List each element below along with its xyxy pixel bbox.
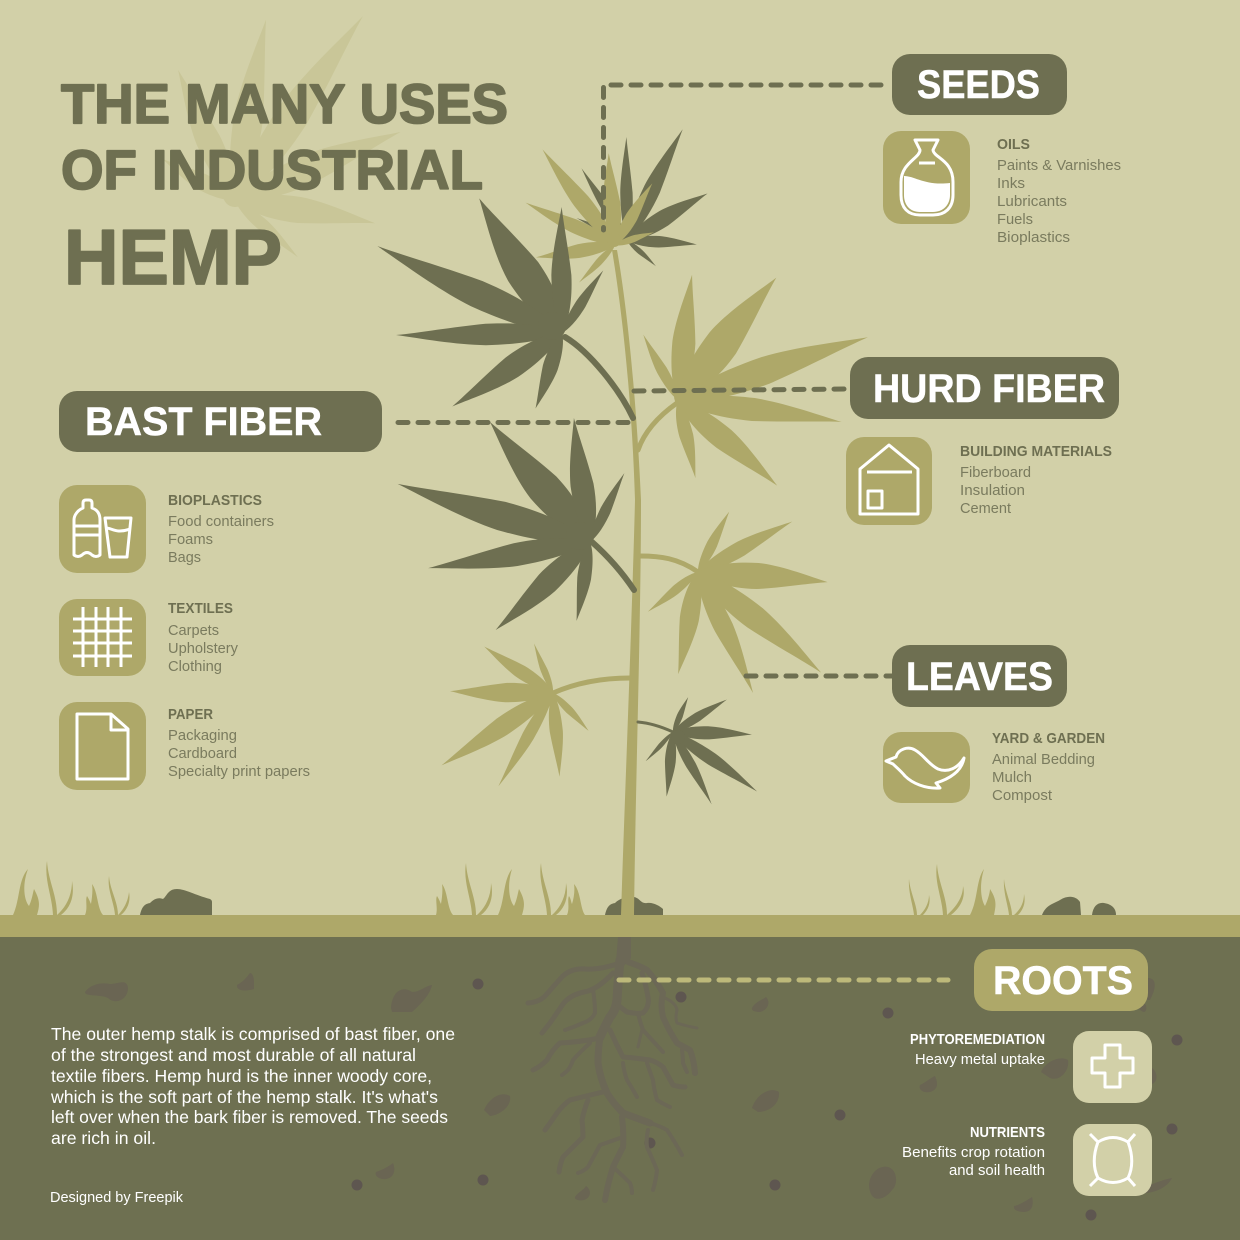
connector: leaves	[746, 674, 893, 678]
text block: textiles	[168, 600, 238, 675]
text block: paper: PAPER	[168, 706, 213, 723]
heading: leaves: LEAVES	[906, 655, 1053, 699]
heading: hurd fiber: HURD FIBER	[873, 367, 1105, 411]
text block: phytoremediation: Heavy metal uptake	[915, 1051, 1045, 1068]
leaf: top light	[522, 145, 657, 285]
text block: description: which is the soft part of the hemp stalk. It's what's	[50, 1087, 438, 1107]
connector: bast fiber	[398, 420, 630, 425]
text block: yard and garden: Compost	[992, 787, 1053, 804]
text block: oils: OILS	[997, 136, 1030, 153]
hemp roots	[528, 937, 697, 1200]
leaf: middle left dark	[393, 412, 629, 639]
heading: bast fiber	[59, 391, 382, 452]
icon: bottle and cup	[59, 485, 146, 573]
connector: seeds	[604, 85, 881, 230]
icon: bird	[883, 732, 970, 803]
leaf branches	[553, 337, 698, 732]
text block: description: of the strongest and most durable of all natural	[51, 1045, 416, 1065]
text block: bioplastics: BIOPLASTICS	[168, 492, 262, 509]
text block: paper: Specialty print papers	[168, 763, 310, 780]
heading: seeds: SEEDS	[917, 63, 1040, 107]
credit: Designed by Freepik	[50, 1189, 183, 1206]
text block: bioplastics: Bags	[168, 549, 201, 566]
text block: building materials: Fiberboard	[960, 464, 1031, 481]
text block: yard and garden: YARD & GARDEN	[992, 730, 1105, 747]
icon: house	[846, 437, 932, 525]
text block: textiles: Clothing	[168, 658, 222, 675]
text block: oils: Inks	[997, 175, 1025, 192]
text block: oils: Lubricants	[997, 193, 1067, 210]
title: THE MANY USES	[61, 72, 508, 135]
text block: yard and garden: Mulch	[992, 769, 1032, 786]
text block: oils: Bioplastics	[997, 229, 1070, 246]
text block: description: left over when the bark fiber is removed. The seeds	[51, 1107, 448, 1127]
title	[61, 72, 508, 301]
text block: description: textile fibers. Hemp hurd is the inner woody core,	[51, 1066, 432, 1086]
text block: paper: Packaging	[168, 727, 237, 744]
text block: paper: Cardboard	[168, 745, 237, 762]
title: HEMP	[64, 213, 282, 301]
leaf: upper right light	[638, 266, 872, 494]
heading: roots	[974, 949, 1148, 1011]
text block: bioplastics	[168, 492, 274, 566]
hemp plant	[371, 125, 872, 915]
text block: bioplastics: Food containers	[168, 513, 274, 530]
icon: oil vase	[883, 131, 970, 224]
text block: textiles: Upholstery	[168, 640, 238, 657]
heading: seeds	[892, 54, 1067, 115]
stem	[612, 250, 641, 915]
icon: medical cross	[1073, 1031, 1152, 1103]
text block: textiles: Carpets	[168, 622, 219, 639]
connector: roots	[619, 978, 948, 982]
ground band	[0, 915, 1240, 937]
text block: paper	[168, 706, 310, 780]
leaf: lower left light	[437, 641, 592, 790]
text block: textiles: TEXTILES	[168, 600, 233, 617]
text block: building materials: Insulation	[960, 482, 1025, 499]
text block: nutrients: Benefits crop rotation	[902, 1144, 1045, 1161]
text block: nutrients	[902, 1124, 1045, 1179]
text block: yard and garden	[992, 730, 1105, 804]
ground grass and rocks	[13, 861, 1116, 915]
soil blobs and pebbles	[85, 973, 1182, 1220]
text block: nutrients: and soil health	[949, 1162, 1045, 1179]
text block: building materials: BUILDING MATERIALS	[960, 443, 1112, 460]
icon: nutrient bag	[1073, 1124, 1152, 1196]
heading: hurd fiber	[850, 357, 1119, 419]
icon: textile grid	[59, 599, 146, 676]
background watermark leaf	[158, 6, 406, 261]
text block: phytoremediation	[910, 1031, 1045, 1068]
text block: description	[50, 1024, 455, 1148]
text block: description: The outer hemp stalk is comprised of bast fiber, one	[51, 1024, 455, 1044]
title: OF INDUSTRIAL	[61, 138, 483, 201]
text block: yard and garden: Animal Bedding	[992, 751, 1095, 768]
heading: bast fiber: BAST FIBER	[85, 400, 322, 444]
text block: oils: Fuels	[997, 211, 1033, 228]
text block: bioplastics: Foams	[168, 531, 213, 548]
text block: description: are rich in oil.	[51, 1128, 156, 1148]
leaf: lower right dark	[644, 695, 761, 807]
text block: building materials: Cement	[960, 500, 1012, 517]
connector: hurd fiber	[634, 389, 850, 391]
leaf: middle right light	[645, 509, 830, 697]
leaf: top dark	[575, 125, 712, 268]
icon: paper sheet	[59, 702, 146, 790]
text block: phytoremediation: PHYTOREMEDIATION	[910, 1031, 1045, 1048]
text block: oils: Paints & Varnishes	[997, 157, 1121, 174]
heading: leaves	[892, 645, 1067, 707]
leaf: upper left dark	[371, 190, 607, 417]
text block: building materials	[960, 443, 1112, 517]
text block: nutrients: NUTRIENTS	[970, 1124, 1045, 1141]
soil	[0, 937, 1240, 1240]
heading: roots: ROOTS	[993, 959, 1133, 1003]
text block: oils	[997, 136, 1121, 246]
